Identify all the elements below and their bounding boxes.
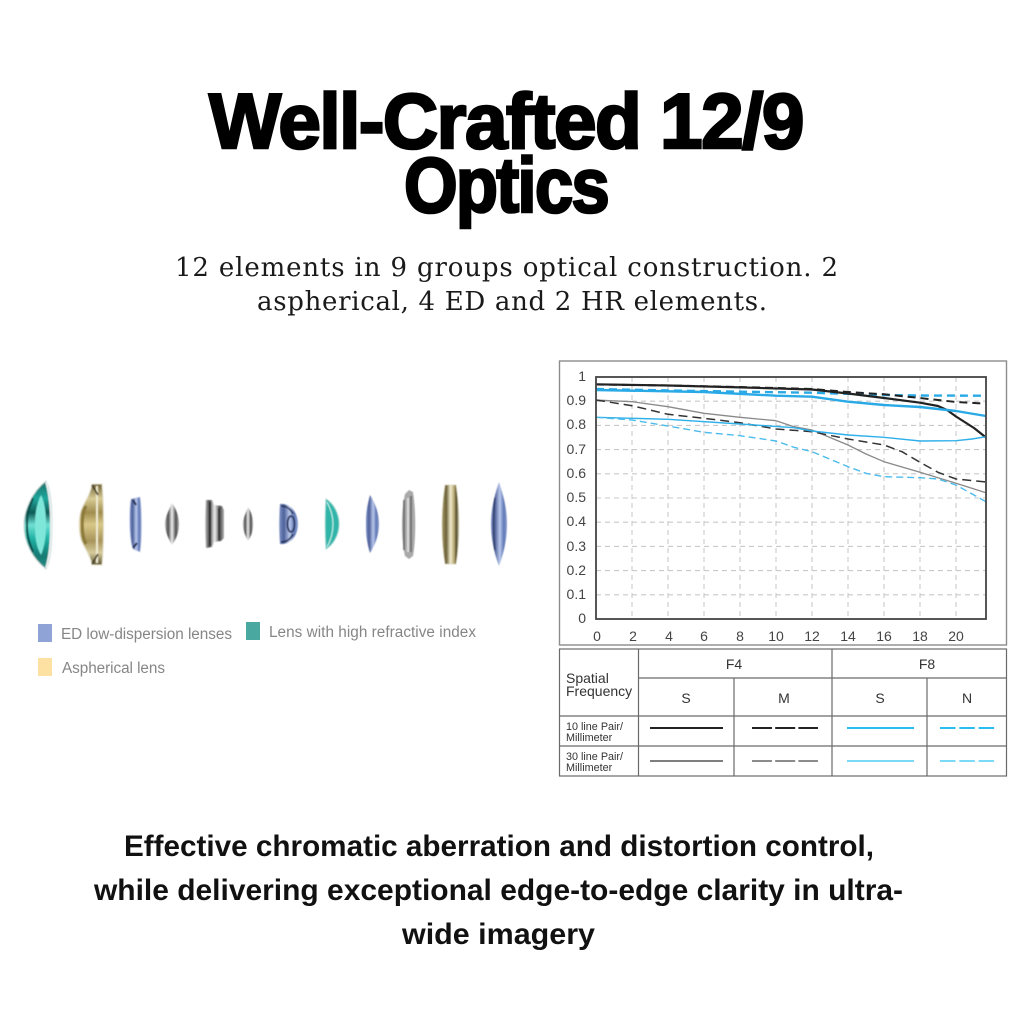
y axis labels: 0.3 bbox=[567, 538, 586, 554]
x axis labels: 14 bbox=[840, 628, 856, 644]
lens 11: gold bbox=[442, 485, 459, 564]
lens 3: blue ED bbox=[130, 497, 142, 552]
lens 8: teal bbox=[325, 499, 339, 549]
row labels: 30 line Pair/ bbox=[566, 751, 623, 763]
spatial frequency heading: Frequency bbox=[566, 683, 632, 699]
lens 1: teal high refractive bbox=[24, 481, 52, 569]
closing statement bbox=[93, 830, 903, 951]
table headers: N bbox=[962, 690, 972, 706]
legend table bbox=[560, 649, 1006, 776]
x axis labels: 4 bbox=[665, 628, 673, 644]
legend: aspherical: Aspherical lens bbox=[62, 660, 165, 677]
lens 7: blue meniscus bbox=[279, 504, 298, 544]
table headers: F8 bbox=[919, 656, 935, 672]
row labels bbox=[566, 721, 623, 774]
lens 2: gold aspherical bbox=[79, 484, 104, 565]
legend bbox=[38, 622, 476, 677]
MTF curves bbox=[596, 384, 986, 502]
y axis labels: 0.8 bbox=[567, 416, 586, 432]
lens 9: blue bbox=[366, 495, 379, 553]
x axis labels: 2 bbox=[629, 628, 637, 644]
closing statement: wide imagery bbox=[401, 918, 596, 951]
x axis labels: 20 bbox=[948, 628, 964, 644]
table headers: F4 bbox=[726, 656, 742, 672]
closing statement: Effective chromatic aberration and distortion control, bbox=[124, 830, 874, 863]
line samples bbox=[650, 728, 995, 761]
table headers bbox=[681, 656, 972, 706]
x axis labels: 12 bbox=[804, 628, 820, 644]
row labels: Millimeter bbox=[566, 732, 613, 744]
x axis labels: 16 bbox=[876, 628, 892, 644]
x axis labels: 6 bbox=[700, 628, 708, 644]
x axis labels bbox=[593, 628, 964, 644]
y axis labels: 0.9 bbox=[567, 392, 586, 408]
table headers: M bbox=[778, 690, 790, 706]
y axis labels: 0.4 bbox=[567, 513, 586, 529]
row labels: 10 line Pair/ bbox=[566, 721, 623, 733]
lens assembly diagram bbox=[24, 481, 507, 569]
lens 5: grey doublet bbox=[205, 500, 224, 548]
legend: ED low-dispersion: ED low-dispersion lenses bbox=[61, 626, 232, 643]
title: Optics bbox=[404, 141, 608, 229]
spatial frequency heading bbox=[566, 670, 632, 699]
x axis labels: 8 bbox=[736, 628, 744, 644]
y axis labels: 0.2 bbox=[567, 562, 586, 578]
y axis labels: 0.6 bbox=[567, 465, 586, 481]
plot frame bbox=[596, 377, 986, 619]
chart grid bbox=[596, 377, 986, 619]
table grid bbox=[560, 649, 1006, 776]
y axis labels: 0.1 bbox=[567, 586, 586, 602]
lens 12: blue bbox=[491, 482, 507, 566]
y axis labels: 1 bbox=[578, 368, 586, 384]
lens 4: grey bbox=[165, 503, 179, 545]
y axis labels: 0 bbox=[578, 610, 586, 626]
x axis labels: 18 bbox=[912, 628, 928, 644]
MTF chart panel bbox=[560, 361, 1006, 645]
y axis labels bbox=[567, 368, 586, 626]
subtitle bbox=[175, 253, 838, 317]
legend: high refractive index: Lens with high refractive index bbox=[269, 624, 476, 641]
lens 6: grey small bbox=[243, 507, 253, 541]
table headers: S bbox=[681, 690, 691, 706]
y axis labels: 0.7 bbox=[567, 441, 586, 457]
subtitle: aspherical, 4 ED and 2 HR elements. bbox=[257, 287, 767, 317]
subtitle: 12 elements in 9 groups optical construction. 2 bbox=[175, 253, 838, 283]
title: Well-Crafted 12/9 bbox=[209, 77, 803, 165]
closing statement: while delivering exceptional edge-to-edge clarity in ultra- bbox=[93, 874, 903, 907]
y axis labels: 0.5 bbox=[567, 489, 586, 505]
table headers: S bbox=[875, 690, 885, 706]
x axis labels: 0 bbox=[593, 628, 601, 644]
x axis labels: 10 bbox=[768, 628, 784, 644]
title bbox=[209, 77, 803, 229]
row labels: Millimeter bbox=[566, 762, 613, 774]
spatial frequency heading: Spatial bbox=[566, 670, 609, 686]
lens 10: grey bbox=[402, 490, 415, 559]
